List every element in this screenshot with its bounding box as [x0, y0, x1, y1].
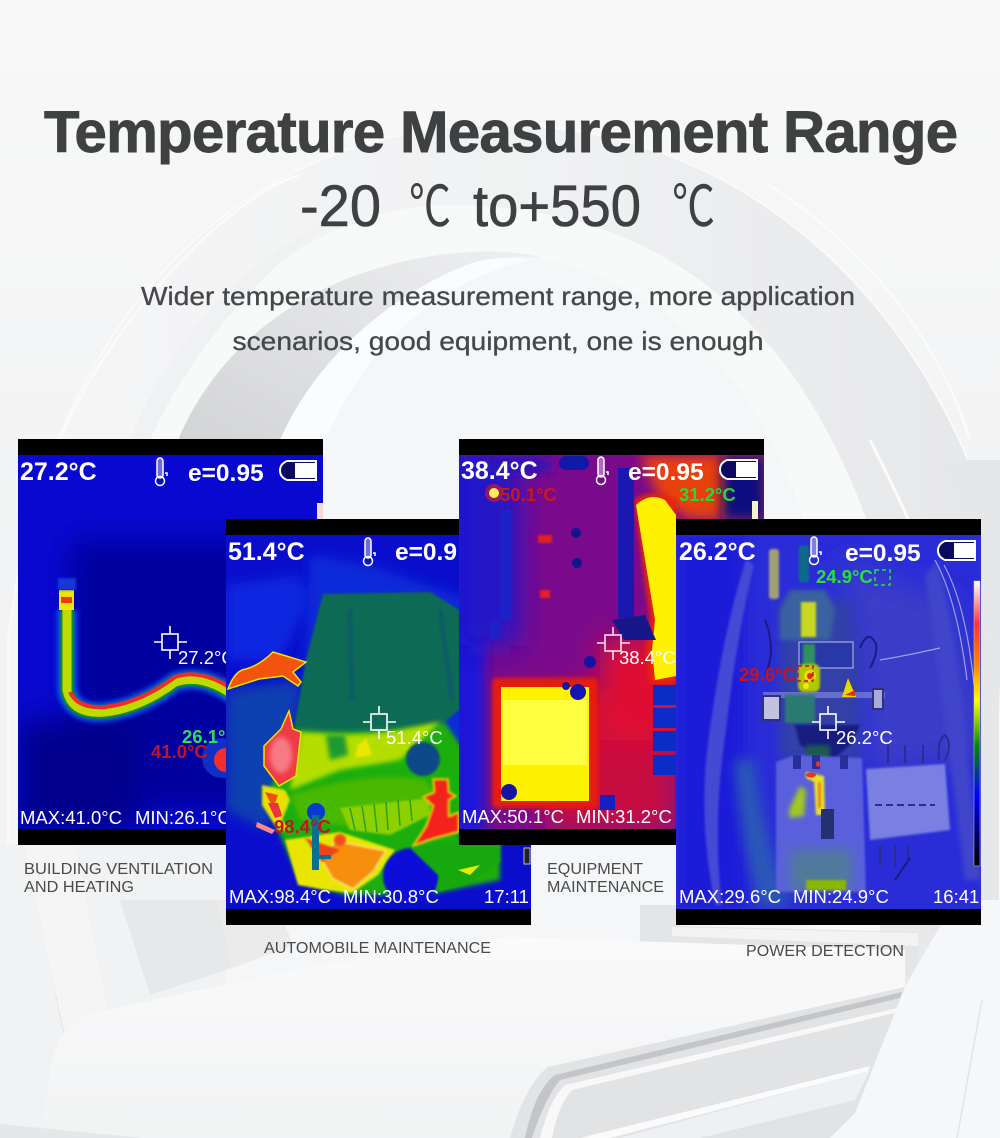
readings: e=0.95	[845, 540, 921, 567]
icon: thermometer	[364, 538, 375, 566]
readings: 26.2°C	[679, 538, 756, 566]
readings: 31.2°C	[679, 484, 736, 505]
color scale	[974, 581, 980, 866]
title: Temperature Measurement Range	[44, 100, 958, 165]
readings: 50.1°C	[500, 484, 557, 505]
readings: MAX:50.1°C	[462, 806, 564, 827]
panel: equipment thermal image	[450, 439, 766, 845]
bench	[45, 937, 905, 1138]
readings: 27.2°C	[20, 458, 97, 486]
readings: e=0.95	[628, 459, 704, 486]
subtitle: temperature range: ℃	[672, 175, 715, 238]
readings: e=0.95	[188, 460, 264, 487]
hood	[294, 592, 470, 731]
readings: MIN:31.2°C	[576, 806, 672, 827]
panel: automobile thermal image	[226, 519, 531, 925]
icon: battery	[280, 461, 316, 480]
icon: battery	[938, 541, 975, 560]
crosshair	[363, 706, 396, 739]
readings: 38.4°C	[461, 457, 538, 485]
subtitle: temperature range: -20	[300, 174, 381, 239]
marker brackets	[798, 570, 890, 681]
right module	[866, 764, 950, 840]
crosshair	[154, 626, 187, 659]
icon: thermometer	[810, 537, 821, 564]
readings: 29.6°C	[739, 664, 796, 685]
readings	[228, 538, 529, 907]
readings: MAX:29.6°C	[679, 886, 781, 907]
red cross	[413, 779, 459, 846]
caption: building ventilation	[24, 861, 213, 896]
caption: equipment maintenance	[547, 861, 664, 896]
readings: 38.4°C	[619, 647, 676, 668]
icon: thermometer	[156, 458, 167, 486]
caption: equipment maintenance: MAINTENANCE	[547, 879, 664, 896]
readings	[20, 458, 264, 828]
readings: e=0.9	[395, 539, 457, 566]
hand	[228, 652, 306, 689]
readings: 27.2°C	[178, 647, 235, 668]
readings: 17:11	[484, 886, 529, 907]
readings: MAX:41.0°C	[20, 807, 122, 828]
icon: battery	[720, 460, 757, 479]
machine stripes	[510, 987, 905, 1138]
panel: power detection thermal image	[676, 519, 981, 925]
readings: 41.0°C	[151, 741, 208, 762]
crosshair	[597, 627, 630, 660]
subtitle: temperature range	[300, 174, 715, 239]
description text: scenarios, good equipment, one is enough	[232, 326, 764, 356]
readings: 26.2°C	[836, 727, 893, 748]
left ring columns	[25, 845, 108, 1033]
subtitle: temperature range: to+550	[473, 174, 641, 239]
readings	[679, 538, 979, 907]
caption: power detection: POWER DETECTION	[746, 943, 904, 960]
caption: equipment maintenance: EQUIPMENT	[547, 861, 644, 878]
warm lower	[285, 832, 395, 893]
panel: building ventilation thermal image	[18, 439, 323, 845]
icon: thermometer	[596, 457, 608, 484]
readings: 51.4°C	[228, 538, 305, 566]
back table	[640, 905, 918, 978]
description text	[141, 281, 855, 356]
breaker	[776, 755, 866, 892]
readings: 24.9°C	[816, 566, 873, 587]
caption: building ventilation: BUILDING VENTILATION	[24, 861, 213, 878]
caption: automobile maintenance: AUTOMOBILE MAINTENANCE	[264, 940, 491, 957]
readings: MIN:30.8°C	[343, 886, 439, 907]
red pack	[264, 711, 301, 786]
hot spots	[798, 664, 820, 692]
readings: 26.1°C	[182, 726, 239, 747]
readings: MIN:26.1°C	[135, 807, 231, 828]
readings: 16:41	[933, 886, 979, 907]
description text: Wider temperature measurement range, more application	[141, 281, 855, 311]
readings: 51.4°C	[386, 727, 443, 748]
warm green body	[266, 722, 500, 895]
lower-left base	[0, 845, 226, 1138]
subtitle: temperature range: ℃	[409, 175, 451, 238]
post	[307, 803, 325, 821]
right ring column	[830, 900, 1000, 1138]
readings: MIN:24.9°C	[793, 886, 889, 907]
readings: MAX:98.4°C	[229, 886, 331, 907]
caption: building ventilation: AND HEATING	[24, 879, 134, 896]
crosshair	[812, 706, 845, 739]
center cabinet tint	[780, 600, 860, 760]
readings: 98.4°C	[274, 816, 331, 837]
terminals	[799, 642, 853, 668]
readings	[461, 457, 736, 827]
